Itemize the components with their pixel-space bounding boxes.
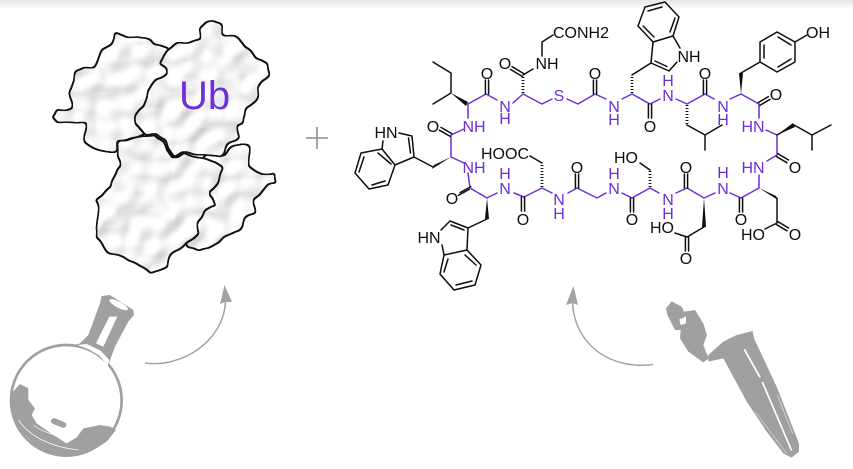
black atom labels: O xyxy=(789,227,801,244)
icon: microcentrifuge tube xyxy=(666,301,799,458)
black atom labels: HOOC xyxy=(481,146,529,163)
purple atom labels: H xyxy=(553,206,565,223)
side chains and carbonyl bonds xyxy=(355,2,831,290)
peptide backbone xyxy=(451,94,777,198)
purple atom labels: NH xyxy=(462,160,486,177)
protein surface: ubiquitin complex xyxy=(51,21,276,274)
purple atom labels: S xyxy=(554,88,564,105)
tyrosine ring xyxy=(760,32,807,72)
black atom labels: O xyxy=(589,66,601,83)
purple atom labels xyxy=(462,73,765,223)
black atom labels: O xyxy=(680,160,692,177)
black atom labels: O xyxy=(626,212,638,229)
purple atom labels: H xyxy=(608,112,620,129)
purple atom labels: N xyxy=(499,99,511,116)
black atom labels: NH xyxy=(677,49,701,66)
purple atom labels: N xyxy=(662,88,674,105)
purple atom labels: H xyxy=(499,166,511,183)
black atom labels: O xyxy=(789,160,801,177)
black atom labels: O xyxy=(644,119,656,136)
purple atom labels: N xyxy=(553,192,565,209)
black atom labels: O xyxy=(517,212,529,229)
purple atom labels: HN xyxy=(741,119,765,136)
black atom labels: HN xyxy=(417,230,441,247)
stereo wedges xyxy=(432,73,795,227)
black atom labels: NH xyxy=(535,56,559,73)
label: Ub: Ub xyxy=(179,74,230,118)
arrow: tube to peptide xyxy=(566,286,653,365)
purple atom labels: H xyxy=(608,166,620,183)
tryptophan ring top xyxy=(638,2,680,71)
black atom labels: HN xyxy=(374,125,398,142)
black atom labels: O xyxy=(770,87,782,104)
plus sign xyxy=(306,127,328,149)
purple atom labels: H xyxy=(499,111,511,128)
black atom labels: O xyxy=(446,191,458,208)
purple atom labels: N xyxy=(499,181,511,198)
purple atom labels: HN xyxy=(741,160,765,177)
purple atom labels: H xyxy=(662,73,674,90)
purple atom labels: N xyxy=(717,181,729,198)
arrow: flask to protein xyxy=(145,285,232,364)
purple atom labels: N xyxy=(608,99,620,116)
black atom labels: O xyxy=(499,56,511,73)
purple atom labels: N xyxy=(717,99,729,116)
purple atom labels: H xyxy=(662,206,674,223)
black atom labels: O xyxy=(699,66,711,83)
protein lobe: lower front xyxy=(94,134,222,274)
purple atom labels: N xyxy=(608,181,620,198)
protein lobe: upper left xyxy=(51,33,180,154)
black atom labels: CONH2 xyxy=(553,25,609,42)
tryptophan ring lower xyxy=(440,219,487,290)
purple atom labels: H xyxy=(717,165,729,182)
molecule: macrocyclic peptide xyxy=(355,2,831,290)
protein lobe: lower right xyxy=(180,143,276,251)
protein lobe: Ub xyxy=(134,21,268,158)
black atom labels: HO xyxy=(650,220,674,237)
black atom labels: HO xyxy=(741,227,765,244)
tryptophan ring left xyxy=(355,133,433,189)
black atom labels: OH xyxy=(806,25,830,42)
icon: round-bottom flask xyxy=(10,295,134,456)
stereo hashes xyxy=(523,75,687,187)
black atom labels: O xyxy=(680,251,692,268)
purple atom labels: NH xyxy=(462,119,486,136)
black atom labels: O xyxy=(735,212,747,229)
black atom labels: O xyxy=(481,66,493,83)
purple atom labels: H xyxy=(717,112,729,129)
black atom labels xyxy=(374,25,830,268)
black atom labels: HO xyxy=(614,150,638,167)
black atom labels: O xyxy=(571,160,583,177)
purple atom labels: N xyxy=(662,192,674,209)
black atom labels: O xyxy=(427,119,439,136)
